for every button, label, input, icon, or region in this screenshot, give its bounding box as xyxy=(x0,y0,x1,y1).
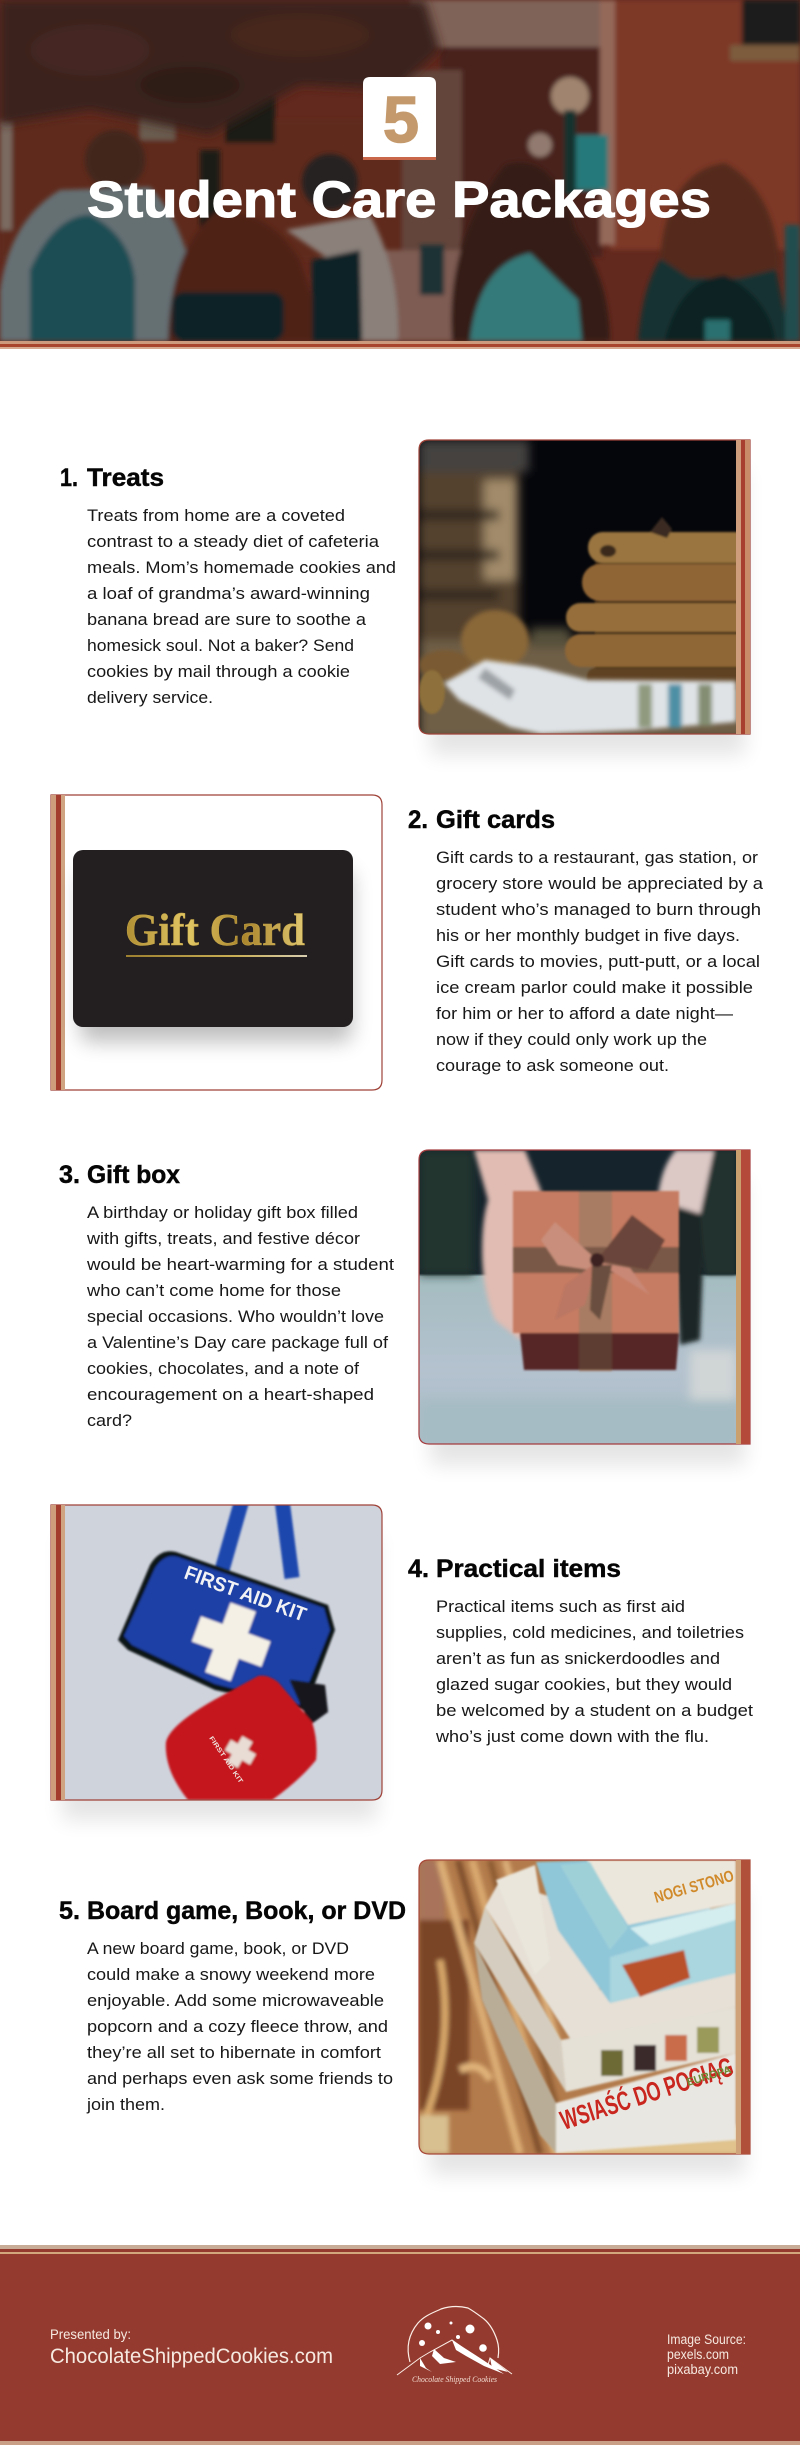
photo panel: first aid kits: FIRST AID KIT xyxy=(207,1735,244,1785)
section 1 heading: Treats xyxy=(87,464,164,492)
photo panel: cookies xyxy=(419,440,778,755)
section 4 text: Practical items such as first aid xyxy=(436,1598,685,1616)
section 5 text: popcorn and a cozy fleece throw, and xyxy=(87,2018,388,2036)
presented by xyxy=(50,2326,333,2368)
title: Student Care Packages xyxy=(87,171,711,228)
image sources xyxy=(667,2332,746,2377)
section 2 text: Gift cards to a restaurant, gas station, or xyxy=(436,849,759,867)
photo panel: first aid kits: FIRST AID KIT xyxy=(181,1562,309,1626)
section 4 text xyxy=(435,1598,753,1746)
section 2 heading: 2. xyxy=(408,806,428,834)
blue bag handle xyxy=(222,1500,292,1578)
photo panel: gift box xyxy=(419,1150,750,1465)
section 2 text xyxy=(436,849,764,1075)
section 5 heading: 5. xyxy=(59,1897,80,1925)
section 1 text: Treats from home are a coveted xyxy=(87,507,345,525)
section 1 text: delivery service. xyxy=(87,689,213,707)
section 3 heading: 3. xyxy=(59,1161,80,1189)
section 1 text: contrast to a steady diet of cafeteria xyxy=(87,533,380,551)
footer panel xyxy=(0,2245,800,2445)
blue bag xyxy=(118,1551,335,1710)
card shadow xyxy=(80,870,352,1042)
section 2 text: for him or her to afford a date night— xyxy=(436,1005,734,1023)
photo panel: first aid kits xyxy=(51,1500,382,1820)
section 2 text: ice cream parlor could make it possible xyxy=(436,979,753,997)
section 5 text: enjoyable. Add some microwaveable xyxy=(87,1992,384,2010)
section 4 text: glazed sugar cookies, but they would xyxy=(436,1676,732,1694)
header stripe xyxy=(0,341,800,349)
section 3 text: cookies, chocolates, and a note of xyxy=(87,1360,359,1378)
section 3 text: special occasions. Who wouldn’t love xyxy=(87,1308,384,1326)
section 3 text: A birthday or holiday gift box filled xyxy=(87,1204,358,1222)
section 1 text: cookies by mail through a cookie xyxy=(87,663,350,681)
photo panel: board games xyxy=(419,1860,750,2175)
section 3 text xyxy=(86,1204,394,1430)
section 1 text xyxy=(87,507,396,707)
gift card: Gift Card xyxy=(125,904,305,955)
section 3 text: with gifts, treats, and festive décor xyxy=(86,1230,361,1248)
header banner: students walking on campus xyxy=(0,0,800,341)
section 3 text: would be heart-warming for a student xyxy=(86,1256,394,1274)
section 5 text: join them. xyxy=(86,2096,165,2114)
red bag xyxy=(166,1676,328,1800)
photo panel: board games: EUROPA xyxy=(685,2064,733,2089)
section 1 text: homesick soul. Not a baker? Send xyxy=(87,637,354,655)
section 2 text: now if they could only work up the xyxy=(436,1031,707,1049)
logo: cookie and mountains xyxy=(397,2307,512,2384)
section 2 text: his or her monthly budget in five days. xyxy=(436,927,740,945)
image sources: pixabay.com xyxy=(667,2362,738,2377)
section 1 text: banana bread are sure to soothe a xyxy=(87,611,367,629)
image sources: pexels.com xyxy=(667,2347,729,2362)
section 2 text: Gift cards to movies, putt-putt, or a local xyxy=(436,953,760,971)
presented by: Presented by: xyxy=(50,2326,131,2342)
section 5 heading: Board game, Book, or DVD xyxy=(87,1897,406,1925)
section 2 heading: Gift cards xyxy=(436,806,555,834)
section 3 text: encouragement on a heart-shaped xyxy=(87,1386,374,1404)
presented by: ChocolateShippedCookies.com xyxy=(50,2345,333,2368)
section 5 text: could make a snowy weekend more xyxy=(87,1966,375,1984)
section 3 text: who can’t come home for those xyxy=(86,1282,341,1300)
section 4 text: who’s just come down with the flu. xyxy=(435,1728,709,1746)
section 5 text: they’re all set to hibernate in comfort xyxy=(87,2044,381,2062)
section 3 heading: Gift box xyxy=(87,1161,180,1189)
section 4 text: aren’t as fun as snickerdoodles and xyxy=(436,1650,720,1668)
section 2 text: grocery store would be appreciated by a xyxy=(436,875,764,893)
section 3 text: card? xyxy=(87,1412,132,1430)
section 5 text: and perhaps even ask some friends to xyxy=(87,2070,393,2088)
section 3 text: a Valentine’s Day care package full of xyxy=(87,1334,388,1352)
section 5 text: A new board game, book, or DVD xyxy=(87,1940,349,1958)
section 2 text: student who’s managed to burn through xyxy=(436,901,761,919)
gift card xyxy=(73,850,353,1027)
number badge xyxy=(363,77,436,160)
section 2 text: courage to ask someone out. xyxy=(436,1057,669,1075)
section 1 heading: 1. xyxy=(60,464,78,492)
image sources: Image Source: xyxy=(667,2332,746,2347)
section 4 heading: Practical items xyxy=(436,1555,621,1583)
section 1 text: meals. Mom’s homemade cookies and xyxy=(87,559,396,577)
section 5 text xyxy=(86,1940,393,2114)
section 4 text: supplies, cold medicines, and toiletries xyxy=(436,1624,744,1642)
section 4 heading: 4. xyxy=(408,1555,429,1583)
logo: cookie and mountains: Chocolate Shipped Cookies xyxy=(412,2375,497,2384)
section 4 text: be welcomed by a student on a budget xyxy=(436,1702,753,1720)
section 1 text: a loaf of grandma’s award-winning xyxy=(87,585,370,603)
photo panel: board games: NOGI STONO xyxy=(652,1868,736,1907)
number badge: 5 xyxy=(383,83,419,156)
photo panel: gift card xyxy=(51,795,382,1090)
